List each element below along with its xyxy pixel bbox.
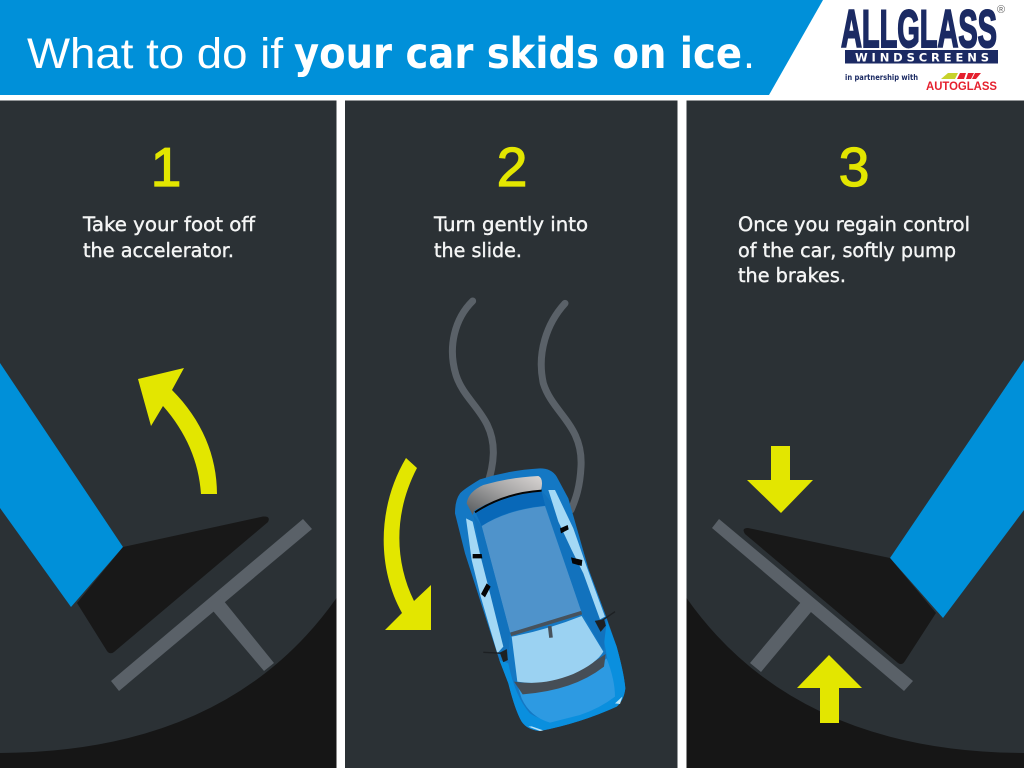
- step 1 text: the accelerator.: [83, 239, 234, 262]
- logo: Allglass Windscreens in partnership with Autoglass: ®: [997, 4, 1005, 16]
- title: .: [743, 30, 755, 78]
- title: your car skids on ice: [294, 29, 742, 79]
- panel 1: foot off the accelerator: [0, 100, 336, 768]
- header banner: [0, 0, 823, 95]
- mirrors: [483, 612, 615, 662]
- floor shadow: [0, 598, 336, 768]
- step number 1: 1: [151, 136, 181, 198]
- shoe: [77, 516, 269, 653]
- skid marks: [452, 301, 581, 510]
- step 3 text: of the car, softly pump: [738, 239, 956, 262]
- step 3 text: the brakes.: [738, 264, 846, 287]
- dash strip: [514, 654, 606, 694]
- step 3 text: Once you regain control: [738, 213, 970, 236]
- leg: [890, 360, 1024, 618]
- logo: Allglass Windscreens in partnership with Autoglass: in partnership with: [845, 73, 918, 82]
- arrow up: [797, 655, 862, 723]
- pillars: [473, 525, 582, 597]
- pedal: [712, 519, 913, 691]
- arrow up-left: [138, 368, 217, 494]
- windscreen frame: [511, 613, 582, 638]
- step 2 text: Turn gently into: [433, 213, 588, 236]
- step number 2: 2: [497, 136, 527, 198]
- windscreen: [512, 616, 603, 683]
- shoe: [744, 528, 936, 664]
- logo: Allglass Windscreens in partnership with Autoglass: [841, 0, 1005, 93]
- rear band: [476, 492, 545, 526]
- floor shadow: [686, 598, 1024, 768]
- roof rails: [473, 491, 607, 653]
- roof: [482, 506, 582, 633]
- hood: [517, 658, 615, 723]
- arrow curving down: [384, 458, 431, 630]
- rear window: [467, 476, 542, 515]
- logo: Allglass Windscreens in partnership with Autoglass: AUTOGLASS: [926, 81, 997, 93]
- car: [455, 468, 625, 731]
- logo: Allglass Windscreens in partnership with Autoglass: WINDSCREENS: [855, 50, 989, 64]
- step number 3: 3: [839, 136, 869, 198]
- step 3 text: [738, 213, 970, 287]
- leg: [0, 363, 123, 607]
- title: What to do if: [27, 30, 284, 78]
- step 1 text: Take your foot off: [82, 213, 256, 236]
- side windows: [466, 490, 605, 653]
- step 2 text: [433, 213, 588, 262]
- arrow down: [747, 446, 813, 513]
- step 2 text: the slide.: [434, 239, 522, 262]
- panel 3: pump the brakes: [686, 100, 1024, 768]
- step 1 text: [82, 213, 256, 262]
- panel 2: turn into the slide: [345, 100, 678, 768]
- car body: [455, 468, 625, 731]
- pedal: [111, 519, 312, 691]
